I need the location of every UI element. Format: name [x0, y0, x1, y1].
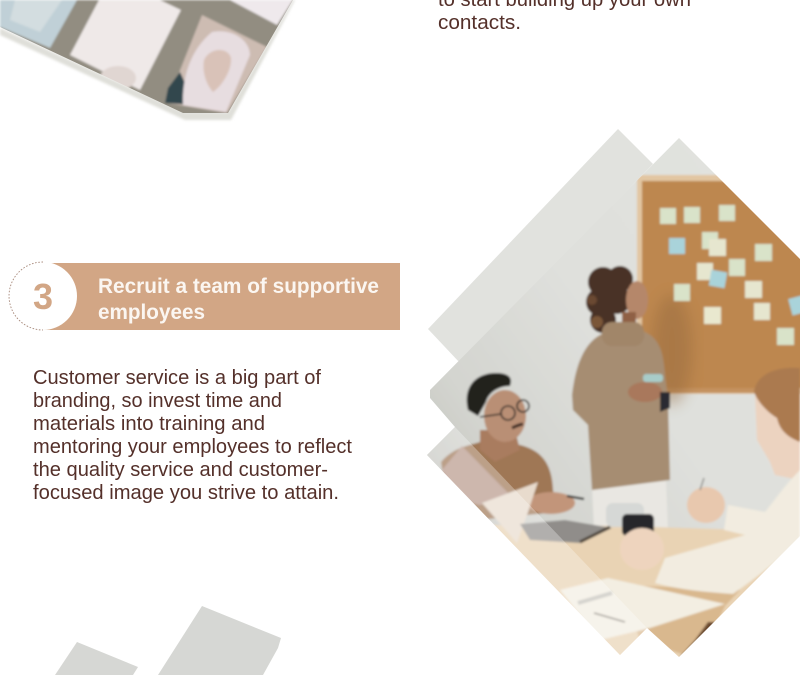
- banner title: Recruit a team of supportive: [98, 275, 379, 298]
- laptop: [482, 482, 538, 543]
- step 3 body text: the quality service and customer-: [33, 459, 328, 481]
- step 3 header banner: [9, 262, 400, 330]
- seated man: [441, 373, 584, 520]
- step 3 body text: Customer service is a big part of: [33, 367, 321, 389]
- standing woman: [572, 266, 670, 530]
- team meeting photo in diamond strips: [420, 130, 800, 675]
- step 3 body text: [33, 367, 352, 504]
- pale back strip behind photo: [428, 129, 653, 363]
- step 3 body text: materials into training and: [33, 413, 265, 435]
- sleeve: [655, 470, 800, 594]
- face and neck: [480, 430, 520, 462]
- marble tile: [0, 0, 77, 48]
- sweater: [572, 330, 670, 490]
- wall: [427, 138, 792, 530]
- banner bar: [43, 263, 400, 330]
- face: [626, 281, 648, 319]
- glasses: [480, 400, 529, 420]
- pale tile: [70, 0, 181, 90]
- hair: [586, 266, 633, 333]
- top-right paragraph ending: contacts.: [438, 12, 521, 34]
- pale top-right tile: [230, 0, 293, 25]
- top-right paragraph ending: [438, 0, 691, 34]
- person seated right: [620, 368, 800, 594]
- corkboard: [637, 175, 800, 405]
- photo shadow: [0, 0, 295, 120]
- mug and cup: [606, 503, 654, 536]
- white trousers: [592, 480, 668, 530]
- banner title: employees: [98, 301, 205, 324]
- step 3 body text: mentoring your employees to reflect: [33, 436, 352, 458]
- neck and face: [755, 395, 800, 480]
- hands and phone: [628, 382, 662, 402]
- step 3 body text: focused image you strive to attain.: [33, 482, 339, 504]
- sweater: [441, 441, 556, 520]
- hair: [467, 373, 511, 416]
- notebook: [520, 520, 612, 543]
- papers on table: [560, 578, 725, 640]
- shell tile: [167, 15, 267, 113]
- lighter lower strip overlay: [427, 427, 647, 655]
- table: [494, 524, 772, 657]
- hands: [687, 487, 725, 523]
- banner title: [98, 275, 379, 324]
- pointing hand and pen: [527, 492, 575, 514]
- number badge: 3: [33, 276, 53, 317]
- bottom-left pale tilted tiles: [55, 606, 281, 675]
- hair: [754, 368, 800, 442]
- step 3 body text: branding, so invest time and: [33, 390, 282, 412]
- number badge: [9, 262, 77, 330]
- sticky notes: [660, 205, 800, 345]
- top-left tilted photo: [0, 0, 300, 120]
